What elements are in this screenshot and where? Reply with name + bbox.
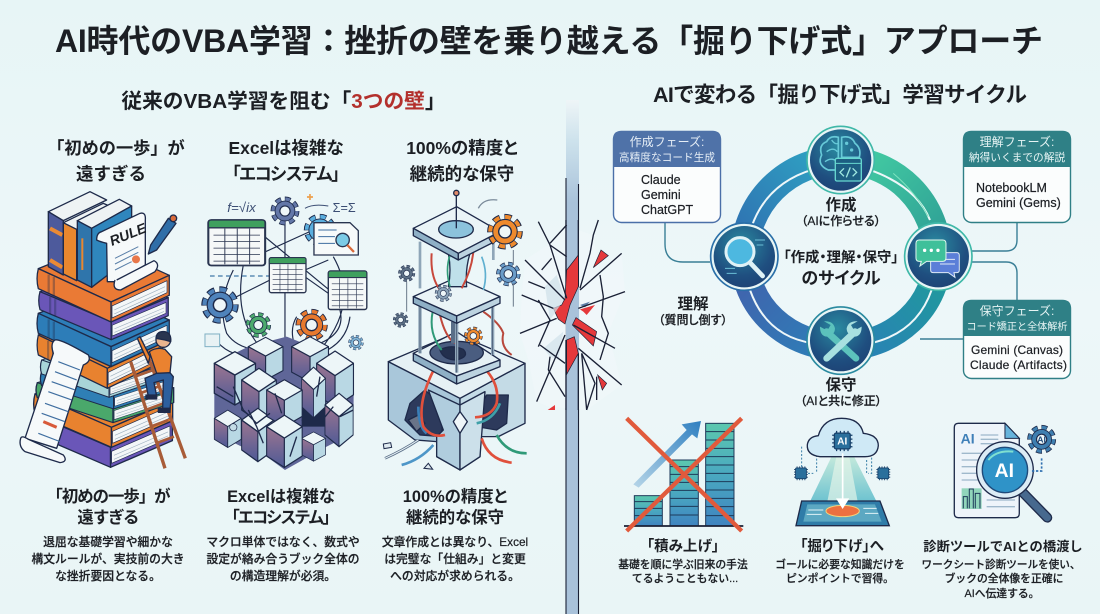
column heading: accuracy and maintenance: 継続的な保守 — [410, 164, 514, 184]
icon: AI diagnostic magnifier: AI — [961, 431, 975, 447]
callout: maintain phase — [963, 300, 1071, 378]
label: create — [801, 195, 881, 228]
illustration: tangled Excel network with broken blocks: Σ=Σ — [333, 201, 356, 215]
label: understand: （質問し倒す） — [658, 312, 728, 327]
connector lines — [665, 223, 1017, 339]
text block: diagnostic tool: ワークシート診断ツールを使い、 — [922, 558, 1080, 571]
illustration: exposed machine on cracked pedestal — [383, 190, 527, 470]
text block: stacking: 基礎を順に学ぶ旧来の手法 — [618, 557, 748, 571]
panel: three walls — [20, 90, 528, 583]
callout: maintain phase: 保守フェーズ: — [980, 303, 1054, 318]
text block: drilling down — [775, 537, 905, 585]
callout: create phase: Claude — [641, 173, 681, 187]
icon: chat bubbles — [905, 223, 972, 290]
text block: accuracy and maintenance: 100%の精度と — [403, 487, 507, 506]
icon: AI beam drill-down: AI — [837, 437, 848, 448]
column heading: first step — [47, 138, 185, 184]
text block: diagnostic tool: AIへ伝達する。 — [965, 586, 1039, 600]
text block: Excel ecosystem: マクロ単体ではなく、数式や — [206, 535, 360, 549]
callout: create phase: ChatGPT — [641, 203, 693, 217]
label: create: 作成 — [825, 195, 857, 214]
label: create: （AIに作らせる） — [801, 214, 881, 228]
text block: Excel ecosystem: 「エコシステム」 — [224, 509, 338, 527]
callout: maintain phase: Claude (Artifacts) — [970, 358, 1067, 372]
illustration: stack of books — [20, 192, 185, 468]
text block: first step — [31, 487, 185, 583]
text block: Excel ecosystem — [206, 487, 360, 583]
text block: first step: 「初めの一歩」が — [46, 487, 171, 506]
text block: accuracy and maintenance: 継続的な保守 — [406, 509, 504, 527]
callout: maintain phase: Gemini (Canvas) — [971, 343, 1063, 357]
callout: understand phase: 納得いくまでの解説 — [969, 151, 1065, 164]
text block: first step: 退屈な基礎学習や細かな — [43, 535, 173, 549]
icon: AI beam drill-down — [794, 418, 890, 526]
text block: accuracy and maintenance — [382, 487, 528, 583]
text block: drilling down: ピンポイントで習得。 — [786, 571, 894, 585]
illustration: tangled Excel network with broken blocks — [205, 194, 367, 470]
text block: diagnostic tool: ブックの全体像を正確に — [945, 571, 1063, 585]
text block: first step: な挫折要因となる。 — [55, 569, 161, 583]
text block: stacking: てるようこともない... — [632, 572, 738, 585]
text block: accuracy and maintenance: 文章作成とは異なり、Excel — [382, 535, 528, 549]
label: cycle center: のサイクル — [801, 269, 881, 288]
column heading: accuracy and maintenance: 100%の精度と — [406, 138, 518, 158]
divider: cracked wall — [520, 100, 625, 614]
text block: stacking — [618, 537, 748, 585]
illustration: stack of books: RULE — [107, 219, 149, 249]
text block: Excel ecosystem: の構造理解が必須。 — [230, 569, 336, 583]
icon: AI diagnostic magnifier — [954, 423, 1053, 518]
text block: stacking: 「積み上げ」 — [647, 537, 719, 555]
text block: Excel ecosystem: 設定が絡み合うブック全体の — [206, 552, 360, 566]
column heading: accuracy and maintenance — [406, 138, 518, 184]
title: AI時代のVBA学習：挫折の壁を乗り越える「掘り下げ式」アプローチ — [55, 23, 1043, 59]
label: maintain: 保守 — [825, 376, 857, 394]
label: cycle center: 「作成・理解・保守」 — [783, 248, 899, 266]
text block: drilling down: 「掘り下げ」へ — [800, 537, 884, 555]
icon: magnifier — [711, 223, 778, 290]
illustration: tangled Excel network with broken blocks: f=√ix — [227, 200, 257, 215]
callout: maintain phase: コード矯正と全体解析 — [967, 320, 1067, 333]
icon: brain and code — [807, 126, 874, 194]
icon: crossed-out stacking bars — [624, 418, 743, 531]
heading: learning cycle: AIで変わる「掘り下げ式」学習サイクル — [653, 83, 1027, 107]
text block: diagnostic tool — [922, 538, 1083, 600]
label: cycle center — [783, 248, 899, 288]
callout: understand phase: 理解フェーズ: — [980, 134, 1054, 149]
callout: create phase: Gemini — [641, 188, 681, 202]
column heading: Excel ecosystem: Excelは複雑な — [228, 138, 344, 158]
heading: three walls: 従来のVBA学習を阻む「3つの壁」 — [121, 90, 446, 113]
panel: learning cycle — [613, 83, 1083, 600]
label: understand: 理解 — [677, 295, 709, 313]
column heading: Excel ecosystem: 「エコシステム」 — [224, 164, 348, 184]
column heading: first step: 遠すぎる — [76, 164, 146, 184]
callout: understand phase: Gemini (Gems) — [976, 196, 1061, 210]
label: maintain: （AIと共に修正） — [800, 393, 882, 408]
callout: understand phase: NotebookLM — [976, 181, 1047, 195]
text block: drilling down: ゴールに必要な知識だけを — [775, 557, 905, 571]
text block: first step: 構文ルールが、実技前の大き — [31, 552, 185, 566]
chart: cycle ring — [711, 126, 972, 374]
icon: crossed tools — [807, 307, 874, 374]
text block: accuracy and maintenance: は完璧な「仕組み」と変更 — [384, 552, 526, 566]
callout: create phase — [613, 131, 721, 222]
callout: understand phase — [963, 131, 1071, 222]
label: maintain — [800, 376, 882, 408]
icon: AI diagnostic magnifier: AI — [995, 461, 1014, 482]
text block: diagnostic tool: 診断ツールでAIとの橋渡し — [923, 538, 1083, 554]
callout: create phase: 作成フェーズ: — [630, 134, 704, 149]
column heading: Excel ecosystem — [224, 138, 348, 184]
callout: create phase: 高精度なコード生成 — [619, 151, 715, 164]
label: understand — [658, 295, 728, 327]
column heading: first step: 「初めの一歩」が — [47, 138, 185, 158]
text block: first step: 遠すぎる — [77, 508, 139, 527]
text block: Excel ecosystem: Excelは複雑な — [227, 487, 335, 506]
text block: accuracy and maintenance: への対応が求められる。 — [390, 569, 520, 583]
icon: AI diagnostic magnifier: AI — [1037, 435, 1046, 445]
